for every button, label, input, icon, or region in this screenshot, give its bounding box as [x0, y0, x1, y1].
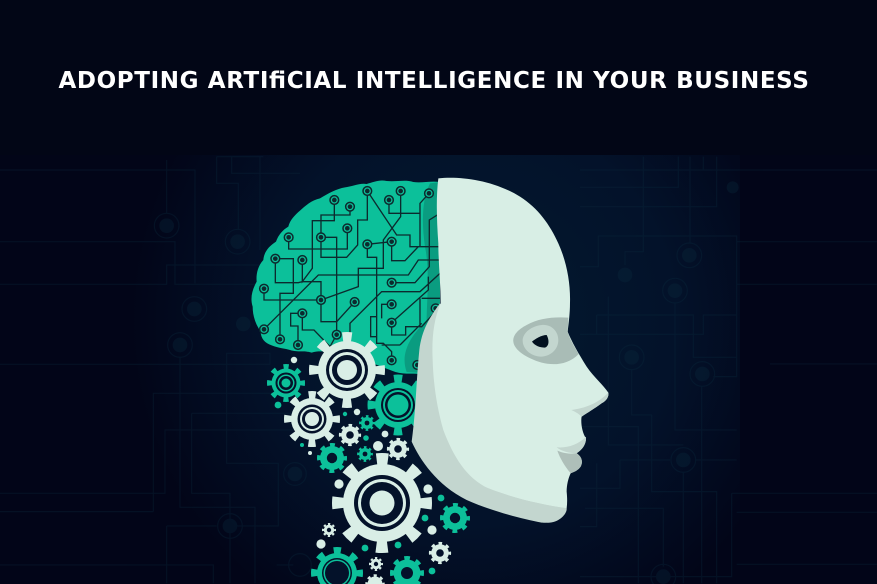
face back shadow [412, 303, 567, 523]
gear: right green [372, 379, 424, 431]
face front [432, 178, 608, 508]
gear: large white [338, 459, 426, 547]
gears cluster [270, 337, 468, 584]
brain shaded side [405, 182, 440, 374]
brain circuit nodes [260, 187, 440, 369]
brain circuit traces [264, 191, 440, 360]
brain [251, 180, 440, 374]
eye socket [513, 317, 579, 364]
faint circuit pattern: right [580, 157, 877, 584]
nose shadow [571, 393, 608, 417]
jaw shadow [488, 488, 567, 523]
gear: top white [314, 337, 380, 403]
brain shape [251, 180, 440, 374]
gear: upper left green [270, 367, 302, 399]
floating dots [291, 357, 437, 549]
small gears: bodies [320, 417, 467, 584]
small gears: teeth [319, 416, 468, 584]
gear: bottom left green [315, 551, 359, 584]
eye pupil [532, 335, 548, 348]
faint circuit pattern: left [0, 157, 311, 583]
gear: left white [288, 395, 336, 443]
mask face [412, 178, 608, 523]
title: ADOPTING ARTIﬁCIAL INTELLIGENCE IN YOUR BUSINESS [58, 68, 810, 94]
lip shadows [557, 437, 586, 453]
